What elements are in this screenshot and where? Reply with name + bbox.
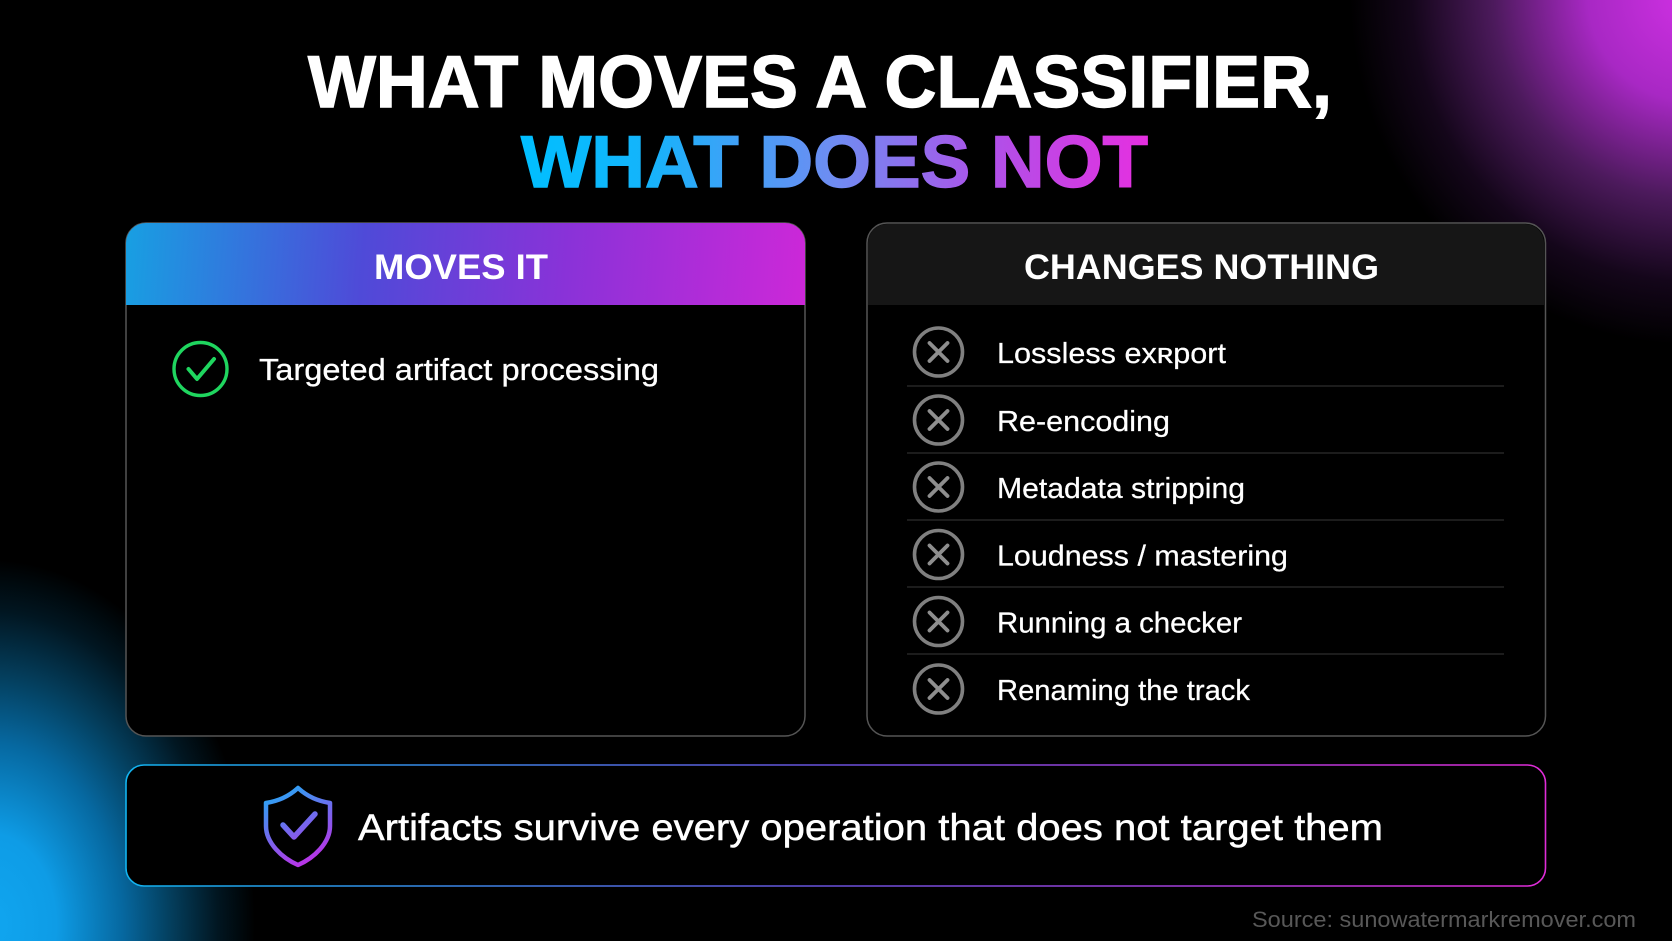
panel header: moves it [126, 223, 805, 305]
item: renaming the track [914, 665, 1250, 713]
item: loudness / mastering [914, 530, 1288, 578]
panel header: changes nothing [868, 224, 1544, 305]
icon: shield check [266, 788, 330, 865]
panel header: changes nothing: CHANGES NOTHING [1024, 248, 1379, 287]
item: lossless export [914, 328, 1226, 376]
item: metadata stripping: Metadata stripping [997, 473, 1245, 505]
icon: green check [174, 342, 227, 396]
item: running a checker [914, 598, 1242, 646]
item: running a checker: Running a checker [997, 608, 1242, 640]
callout text: Artifacts survive every operation that does not target them [358, 806, 1383, 848]
item: re-encoding: Re-encoding [997, 406, 1170, 438]
panel: moves it [126, 223, 805, 736]
item: metadata stripping [914, 463, 1245, 511]
title: WHAT DOES NOT [521, 122, 1148, 203]
title [308, 42, 1332, 203]
callout: artifacts survive [126, 765, 1546, 886]
panel header: moves it: MOVES IT [374, 248, 548, 287]
title: WHAT MOVES A CLASSIFIER, [308, 42, 1332, 123]
panel: changes nothing [867, 223, 1546, 736]
item: targeted artifact processing: Targeted artifact processing [259, 352, 659, 387]
source credit: Source: sunowatermarkremover.com [1252, 907, 1636, 932]
item: lossless export: Lossless exʀport [997, 338, 1226, 370]
item: re-encoding [914, 396, 1170, 444]
item: renaming the track: Renaming the track [997, 675, 1250, 707]
item: loudness / mastering: Loudness / mastering [997, 540, 1288, 572]
